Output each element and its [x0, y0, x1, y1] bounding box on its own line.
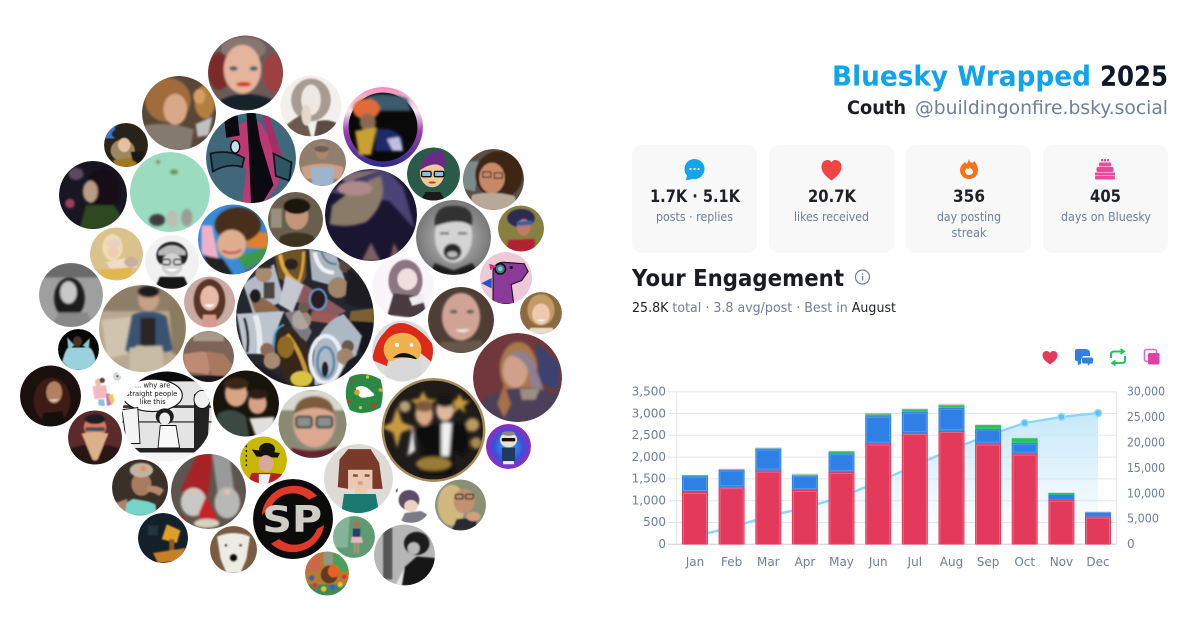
right axis labels: 20,000 — [1127, 436, 1165, 450]
bar: August — [938, 404, 964, 544]
right axis labels: 30,000 — [1127, 384, 1165, 398]
avatar: SP logo: SP — [262, 498, 322, 541]
avatar: person in cap and glasses — [145, 235, 199, 289]
avatar: smiling girl with long hair — [184, 276, 235, 328]
left axis labels: 1,000 — [632, 494, 666, 508]
icon: quotes squares — [1144, 350, 1160, 364]
avatar: brown haired woman in vest — [142, 76, 216, 150]
stacked monthly bars — [682, 404, 1111, 545]
right axis labels: 15,000 — [1127, 461, 1165, 475]
avatar: person in blue hoodie — [58, 329, 99, 370]
avatar: orange lamp in dark room — [138, 513, 188, 563]
avatar: man in denim jacket — [99, 285, 186, 372]
bar: December — [1085, 512, 1111, 545]
panel: likes received card: likes received — [794, 210, 869, 224]
avatar: holding hands — [183, 331, 234, 383]
left axis labels: 2,000 — [632, 450, 666, 464]
avatar: bitmoji with purple hair — [407, 148, 460, 200]
bar: February — [719, 469, 745, 545]
avatar: cross stitch portrait — [324, 444, 393, 513]
avatar: comic panel: like this — [140, 398, 166, 406]
panel: posting streak card: streak — [952, 226, 987, 240]
avatar: christmas wreath — [346, 374, 383, 413]
title: Bluesky Wrapped — [832, 60, 1091, 92]
right axis labels: 10,000 — [1127, 486, 1165, 500]
avatar: spider-man comic art — [206, 113, 296, 203]
avatar: small cartoon couple on white — [92, 372, 122, 406]
avatar: comic panel: straight people — [126, 390, 177, 398]
avatar: comic panel — [122, 372, 212, 462]
month labels: Feb — [721, 555, 742, 569]
bar: July — [902, 408, 928, 545]
panel: likes received card: 20.7K — [808, 187, 857, 207]
bar: October — [1012, 438, 1038, 545]
avatar: person with teal glasses — [278, 390, 346, 458]
month labels: Apr — [795, 555, 815, 569]
avatar: anime woman sketch — [372, 256, 434, 318]
month labels: Dec — [1086, 555, 1110, 569]
avatar: dark haired woman in green — [59, 161, 127, 229]
avatar: comic panel: ... why are — [135, 382, 170, 390]
icon: info — [856, 270, 870, 284]
month labels: Nov — [1050, 555, 1073, 569]
avatar: christmas gnomes — [171, 454, 246, 529]
avatar: screaming man in grayscale — [416, 200, 491, 275]
combined bar and line chart — [632, 384, 1165, 569]
avatar: red haired cartoon — [372, 320, 433, 382]
icon: likes heart — [1042, 351, 1058, 364]
avatar: girl on tennis court — [333, 516, 375, 558]
subtitle: name and handle: @buildingonfire.bsky.social — [915, 97, 1168, 119]
icon: reposts arrows — [1111, 349, 1125, 366]
avatar: curly haired boy with pride flag — [198, 204, 268, 274]
avatar: woman with long blonde hair — [473, 333, 562, 422]
panel: posts and replies card: posts · replies — [656, 210, 733, 224]
avatar: black and white woman — [39, 263, 103, 327]
avatar: close up bearded man — [325, 169, 417, 261]
bar: June — [865, 413, 891, 545]
left axis labels: 3,500 — [632, 384, 666, 398]
panel: posts and replies card: 1.7K · 5.1K — [650, 187, 741, 207]
month labels: Oct — [1014, 555, 1035, 569]
icon: birthday cake — [1095, 159, 1115, 180]
month labels: Sep — [977, 555, 999, 569]
avatar: mirror selfie with light arcs — [236, 249, 374, 387]
avatar: woman with red lips — [208, 36, 284, 110]
avatar: blonde woman small — [520, 292, 562, 334]
month labels — [685, 555, 1110, 569]
bar: May — [828, 451, 854, 544]
panel: days on Bluesky card: days on Bluesky — [1061, 210, 1151, 224]
heading: Your Engagement: Your Engagement — [631, 266, 844, 292]
icon: chat bubble — [684, 159, 704, 180]
avatar: man in black hat on yellow — [240, 436, 287, 484]
bar: November — [1048, 493, 1074, 544]
bar: April — [792, 474, 818, 544]
month labels: Jan — [685, 555, 704, 569]
avatar: white dog with glasses — [210, 526, 257, 573]
avatar: bearded figure in painting style — [68, 410, 122, 464]
left axis labels: 500 — [643, 515, 666, 529]
right axis labels — [1127, 384, 1165, 551]
panel: posting streak card: day posting — [937, 210, 1001, 224]
panel: avatar bubble cluster — [20, 36, 562, 596]
bar: January — [682, 475, 708, 544]
panel: days on Bluesky card: 405 — [1090, 187, 1121, 207]
avatar: SP logo — [253, 479, 333, 559]
left axis labels: 1,500 — [632, 472, 666, 486]
bar: September — [975, 424, 1001, 545]
icon: heart — [822, 160, 842, 180]
panel: days on Bluesky card — [1043, 145, 1168, 253]
month labels: Mar — [757, 555, 780, 569]
avatar: blonde woman with glasses — [435, 480, 486, 530]
avatar: purple dinosaur with headphones — [480, 252, 532, 304]
avatar: smiling dark haired boy — [268, 192, 323, 247]
left axis labels: 2,500 — [632, 428, 666, 442]
month labels: Jun — [868, 555, 888, 569]
left axis labels — [632, 384, 666, 551]
avatar: man in overalls — [299, 139, 346, 186]
month labels: May — [829, 555, 854, 569]
avatar: woman with curly hair and glasses — [463, 149, 524, 210]
avatar: orange haired figure in gradient ring — [343, 87, 423, 167]
avatar: woman in dark hat — [104, 123, 148, 167]
panel: posts and replies card — [632, 145, 757, 253]
right axis labels: 0 — [1127, 537, 1135, 551]
panel: posting streak card — [906, 145, 1031, 253]
engagement summary text: 25.8K total · 3.8 avg/post · Best in August — [632, 300, 896, 316]
title: 2025 — [1100, 60, 1168, 92]
month labels: Jul — [907, 555, 922, 569]
avatar: black and white man — [374, 524, 435, 586]
avatar: woman in cap and teal top — [112, 460, 168, 516]
left axis labels: 3,000 — [632, 406, 666, 420]
avatar: woman with short hair — [428, 287, 494, 353]
left axis labels: 0 — [658, 537, 666, 551]
icon: replies speech bubbles — [1075, 349, 1093, 366]
avatar: anime boy with music notes — [391, 483, 431, 523]
chart legend icons — [1042, 349, 1160, 366]
avatar: mint background with shoes — [130, 152, 210, 232]
bar: March — [755, 448, 781, 545]
avatar: two boys leaning together — [213, 370, 279, 436]
icon: flame — [960, 159, 978, 179]
panel: likes received card — [769, 145, 894, 253]
right axis labels: 25,000 — [1127, 410, 1165, 424]
avatar: painted portrait — [498, 206, 544, 252]
month labels: Aug — [940, 555, 963, 569]
avatar: woman with dark hair smiling — [20, 366, 81, 426]
avatar: ball pit with orange figure — [305, 552, 349, 596]
cumulative area and line — [695, 410, 1102, 544]
panel: posting streak card: 356 — [953, 187, 985, 207]
avatar: blonde girl lying down — [90, 228, 143, 280]
avatar: funko figure on tie-dye — [486, 424, 531, 469]
right axis labels: 5,000 — [1127, 512, 1159, 526]
subtitle: name and handle: Couth — [847, 97, 906, 119]
chart grid — [668, 392, 1116, 544]
avatar: christmas couple with gold stars — [382, 378, 486, 482]
avatar: blonde black and white portrait — [280, 76, 342, 136]
